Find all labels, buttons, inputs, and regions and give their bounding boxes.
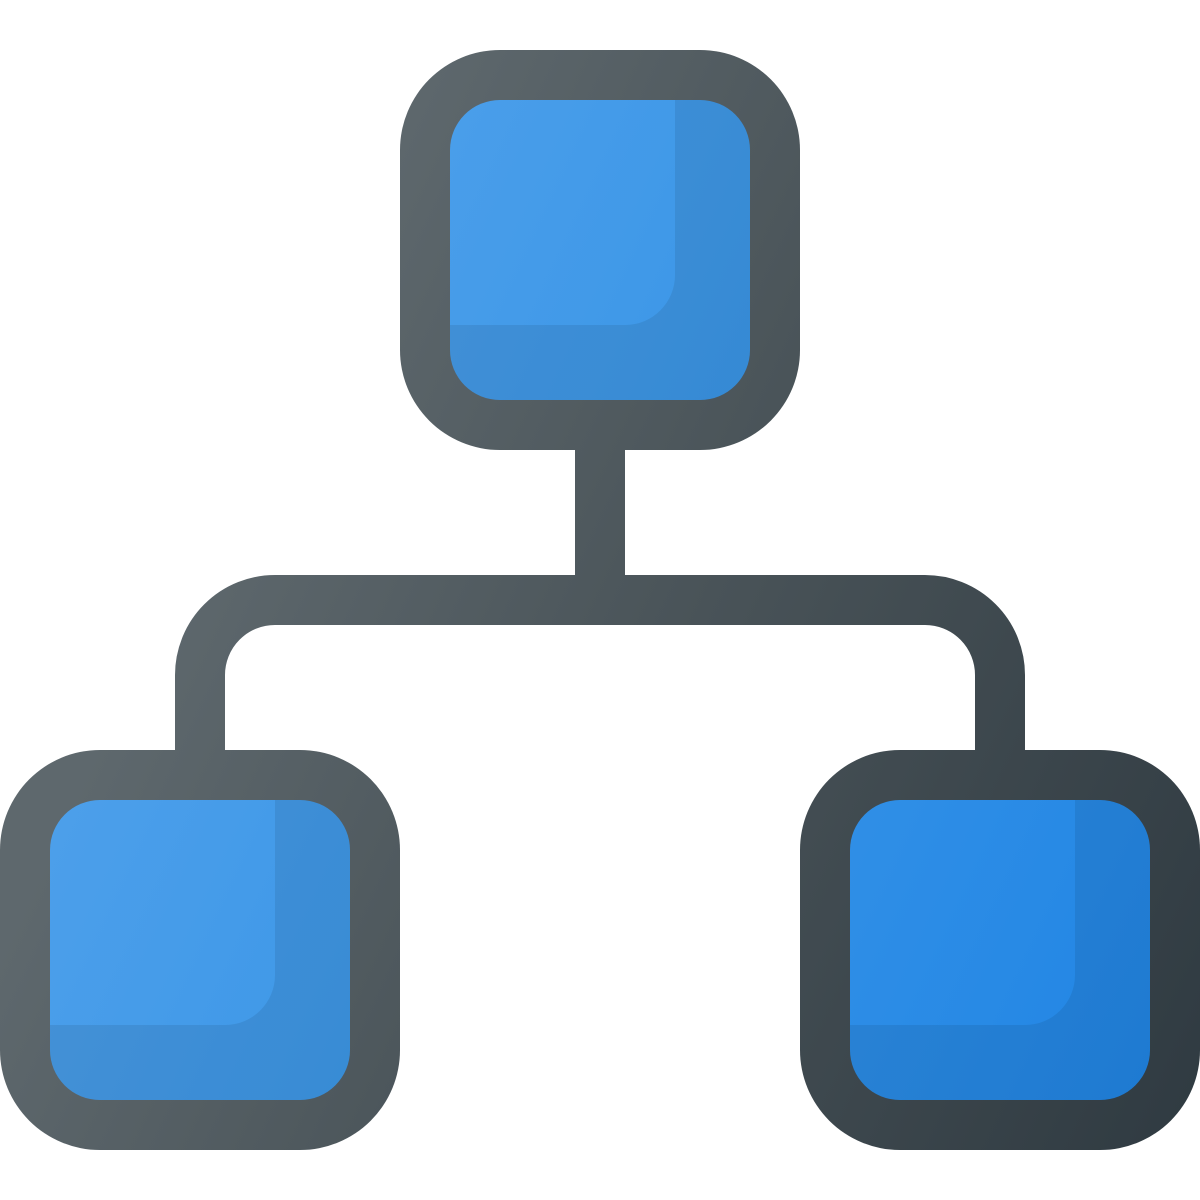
connector lines bbox=[200, 440, 1000, 760]
top node bbox=[400, 50, 800, 450]
bottom-left node bbox=[0, 750, 400, 1150]
bottom-right node bbox=[800, 750, 1200, 1150]
